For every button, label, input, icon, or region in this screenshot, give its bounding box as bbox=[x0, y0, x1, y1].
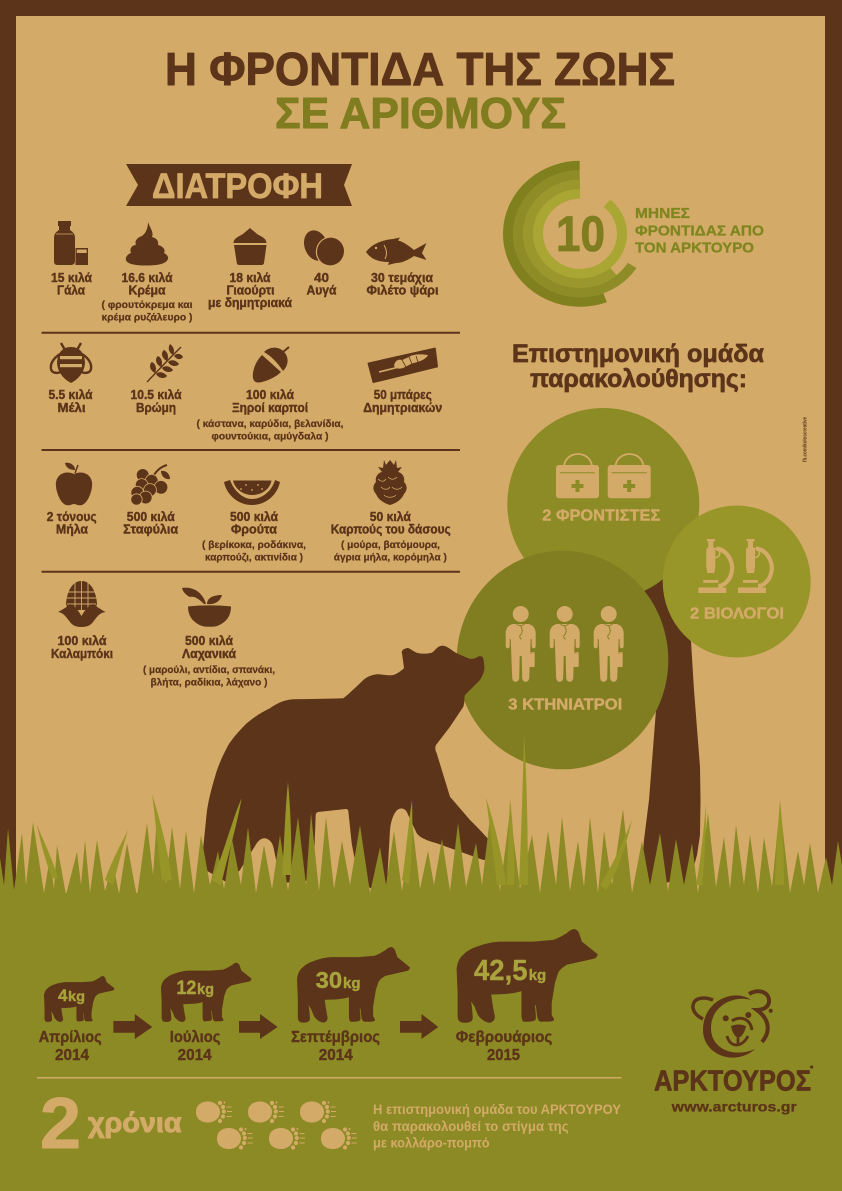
item: oats: Βρώμη bbox=[136, 401, 176, 415]
item: milk: 15 κιλά bbox=[51, 271, 92, 285]
heading: monitoring team: παρακολούθησης: bbox=[530, 365, 747, 393]
two years callout: 2 bbox=[40, 1084, 81, 1164]
item: vegetables bowl: βλήτα, ραδίκια, λάχανο ) bbox=[150, 676, 268, 688]
circle: caretakers bbox=[507, 408, 699, 600]
logo: Arcturos: www.arcturos.gr bbox=[671, 1099, 797, 1115]
item: cream: κρέμα ρυζάλευρο ) bbox=[102, 312, 192, 324]
item: vegetables bowl: Λαχανικά bbox=[182, 647, 236, 661]
item: acorn: ( κάστανα, καρύδια, βελανίδια, bbox=[196, 418, 344, 430]
stage: April 2014: 2014 bbox=[55, 1047, 89, 1064]
item: yogurt bbox=[208, 228, 292, 310]
item: raspberry: άγρια μήλα, κορόμηλα ) bbox=[334, 552, 447, 564]
item: eggs: Αυγά bbox=[306, 284, 337, 298]
stage: February 2015: 42,5 bbox=[474, 955, 528, 987]
logo: Arcturos: ΑΡΚΤΟΥΡΟΣ bbox=[654, 1066, 811, 1098]
title: ΣΕ ΑΡΙΘΜΟΥΣ bbox=[275, 89, 566, 138]
stage: February 2015 bbox=[456, 929, 598, 1064]
item: watermelon: ( βερίκοκα, ροδάκινα, bbox=[202, 539, 306, 551]
panel: diet bbox=[42, 164, 460, 688]
title: Η ΦΡΟΝΤΙΔΑ ΤΗΣ ΖΩΗΣ bbox=[165, 43, 675, 95]
stage: February 2015: kg bbox=[529, 967, 546, 984]
stage: April 2014 bbox=[39, 976, 115, 1064]
ring chart: 10 months of care: ΤΟΝ ΑΡΚΤΟΥΡΟ bbox=[635, 240, 754, 256]
circle: veterinarians bbox=[457, 551, 668, 769]
stage: July 2014: Ιούλιος bbox=[170, 1029, 220, 1046]
title bbox=[165, 43, 675, 138]
item: cereal bars bbox=[363, 348, 442, 415]
circle: veterinarians: 3 ΚΤΗΝΙΑΤΡΟΙ bbox=[508, 696, 622, 713]
item: vegetables bowl: ( μαρούλι, αντίδια, σπανάκι, bbox=[143, 664, 275, 676]
item: fish: 30 τεμάχια bbox=[371, 271, 433, 285]
two years callout: χρόνια bbox=[88, 1107, 182, 1138]
arrow bbox=[239, 1014, 278, 1039]
item: honey bee bbox=[48, 343, 93, 415]
ring chart: 10 months of care: ΦΡΟΝΤΙΔΑΣ ΑΠΟ bbox=[635, 224, 764, 240]
item: yogurt: Γιαούρτι bbox=[226, 284, 275, 298]
stage: September 2014: kg bbox=[343, 975, 360, 992]
icon: first-aid bags bbox=[556, 454, 651, 498]
circle: caretakers: 2 ΦΡΟΝΤΙΣΤΕΣ bbox=[542, 508, 661, 525]
grass bbox=[0, 733, 842, 1191]
stage: July 2014: kg bbox=[197, 981, 214, 998]
circle: biologists bbox=[663, 506, 811, 658]
item: grapes bbox=[123, 465, 179, 536]
stage: April 2014: 4 bbox=[58, 986, 68, 1005]
two years callout bbox=[40, 1084, 182, 1164]
stage: July 2014: 2014 bbox=[178, 1047, 212, 1064]
item: yogurt: με δημητριακά bbox=[208, 296, 292, 310]
item: raspberry bbox=[331, 460, 451, 564]
bear silhouette bbox=[200, 646, 495, 888]
bear growth timeline bbox=[39, 929, 598, 1064]
item: apple: Μήλα bbox=[56, 522, 88, 536]
icon: three vets bbox=[506, 606, 624, 682]
item: watermelon: 500 κιλά bbox=[230, 510, 278, 524]
stage: February 2015: Φεβρουάριος bbox=[456, 1029, 552, 1046]
item: acorn: 100 κιλά bbox=[246, 388, 294, 402]
item: corn: Καλαμπόκι bbox=[51, 647, 113, 661]
ring chart: 10 months of care bbox=[488, 146, 764, 321]
item: raspberry: Καρπούς του δάσους bbox=[331, 522, 451, 536]
logo: Arcturos bbox=[654, 991, 813, 1115]
item: corn: 100 κιλά bbox=[58, 634, 107, 648]
stage: September 2014: 2014 bbox=[319, 1047, 353, 1064]
ring chart: 10 months of care: ΜΗΝΕΣ bbox=[635, 206, 690, 222]
item: acorn: φουντούκια, αμύγδαλα ) bbox=[212, 430, 328, 442]
item: acorn: Ξηροί καρποί bbox=[232, 401, 308, 415]
item: cream: ( φρουτόκρεμα και bbox=[102, 299, 193, 311]
text: tracking note: Η επιστημονική ομάδα του ΑΡΚΤΟΥΡΟΥ bbox=[373, 1102, 621, 1117]
heading: monitoring team: Επιστημονική ομάδα bbox=[512, 340, 765, 368]
credit: fb.com/koloscreative bbox=[802, 417, 808, 462]
item: corn bbox=[51, 581, 113, 661]
item: vegetables bowl bbox=[143, 588, 275, 688]
icon: bear face bbox=[693, 991, 773, 1058]
icon: bear paw prints bbox=[196, 1101, 357, 1150]
circle: biologists: 2 ΒΙΟΛΟΓΟΙ bbox=[690, 605, 784, 622]
stage: April 2014: Απρίλιος bbox=[39, 1029, 102, 1046]
item: cereal bars: 50 μπάρες bbox=[374, 388, 432, 402]
item: cream bbox=[102, 222, 193, 324]
stage: April 2014: kg bbox=[68, 988, 85, 1004]
item: milk: Γάλα bbox=[57, 284, 85, 298]
item: apple: 2 τόνους bbox=[47, 510, 97, 524]
item: cream: 16.6 κιλά bbox=[122, 271, 173, 285]
stage: September 2014: Σεπτέμβριος bbox=[291, 1029, 380, 1046]
item: acorn bbox=[196, 347, 344, 442]
stage: February 2015: 2015 bbox=[487, 1047, 520, 1064]
arrow bbox=[113, 1014, 152, 1039]
item: cereal bars: Δημητριακών bbox=[363, 401, 442, 415]
ring chart: 10 months of care: 10 bbox=[556, 206, 605, 262]
item: grapes: Σταφύλια bbox=[123, 522, 179, 536]
item: fish bbox=[366, 238, 439, 298]
item: cream: Κρέμα bbox=[128, 284, 166, 298]
arrow bbox=[400, 1014, 438, 1039]
item: eggs: 40 bbox=[314, 271, 329, 285]
item: watermelon: Φρούτα bbox=[231, 522, 277, 536]
tree trunk bbox=[640, 560, 700, 906]
item: raspberry: 50 κιλά bbox=[370, 510, 411, 524]
item: vegetables bowl: 500 κιλά bbox=[185, 634, 233, 648]
item: watermelon: καρπούζι, ακτινίδια ) bbox=[205, 552, 303, 564]
stage: July 2014 bbox=[161, 963, 252, 1064]
stage: September 2014: 30 bbox=[316, 967, 342, 993]
heading: monitoring team bbox=[512, 340, 765, 393]
item: oats: 10.5 κιλά bbox=[130, 388, 182, 402]
item: eggs bbox=[300, 227, 349, 298]
item: raspberry: ( μούρα, βατόμουρα, bbox=[341, 539, 440, 551]
text: tracking note: θα παρακολουθεί το στίγμα της bbox=[373, 1119, 569, 1134]
item: yogurt: 18 κιλά bbox=[230, 271, 271, 285]
icon: microscopes bbox=[698, 539, 772, 593]
item: fish: Φιλέτο ψάρι bbox=[366, 284, 439, 298]
item: grapes: 500 κιλά bbox=[127, 510, 175, 524]
stage: September 2014 bbox=[291, 947, 410, 1064]
item: apple bbox=[47, 463, 97, 536]
item: honey bee: 5.5 κιλά bbox=[48, 388, 93, 402]
item: watermelon bbox=[202, 480, 306, 564]
stage: July 2014: 12 bbox=[176, 978, 196, 999]
item: honey bee: Μέλι bbox=[58, 401, 86, 415]
banner: diet heading: ΔΙΑΤΡΟΦΗ bbox=[152, 167, 323, 206]
item: milk bbox=[51, 221, 92, 298]
text: tracking note bbox=[373, 1102, 621, 1151]
item: oats bbox=[130, 344, 183, 415]
text: tracking note: με κολλάρο-πομπό bbox=[373, 1136, 490, 1151]
